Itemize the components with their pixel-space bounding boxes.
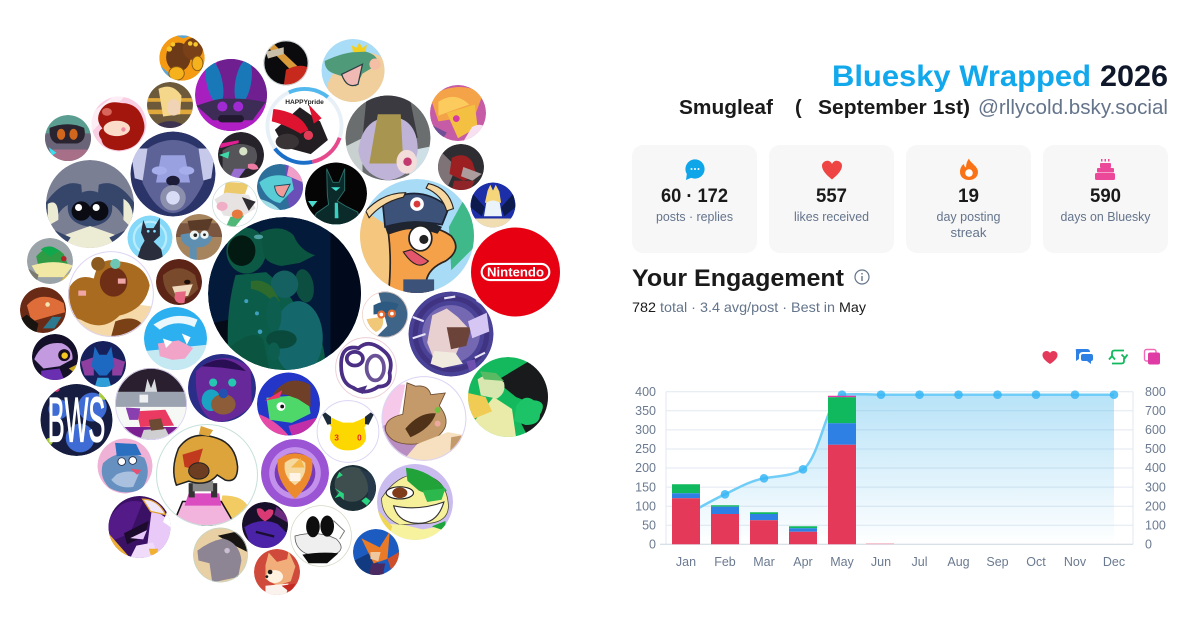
cumulative line	[686, 394, 1114, 514]
engagement summary: May	[839, 299, 866, 315]
stat card: posts and replies: posts · replies	[656, 209, 733, 224]
right axis labels: 200	[1145, 500, 1166, 514]
avatar: purple round dino	[32, 334, 78, 380]
avatar: red fox	[254, 549, 300, 595]
avatar cluster: BWS	[48, 386, 105, 456]
icon: replies	[1076, 349, 1093, 364]
avatar: brown dog	[156, 259, 202, 305]
month labels: Nov	[1064, 555, 1087, 569]
avatar: brown bear belly	[67, 251, 154, 337]
profile line: September 1st)	[818, 97, 970, 119]
avatar: pride wolf: HAPPYpride	[285, 99, 324, 106]
avatar: gray road stripes	[115, 368, 187, 440]
stacked bars	[672, 396, 894, 544]
title: 2026	[1100, 60, 1168, 93]
month labels: Feb	[714, 555, 736, 569]
avatar: teal dragon	[257, 164, 303, 210]
month labels: Jun	[871, 555, 891, 569]
stat card: likes received	[769, 145, 894, 253]
month labels: Apr	[793, 555, 813, 569]
avatar: purple bear	[188, 354, 256, 422]
avatar cluster	[20, 35, 560, 595]
profile line: (	[795, 97, 802, 119]
avatar: blue with glasses	[98, 438, 152, 494]
avatar: green girl	[257, 372, 320, 436]
month labels: Aug	[947, 555, 970, 569]
avatar: crowned blue creature	[470, 182, 516, 228]
left axis labels: 250	[635, 442, 656, 456]
avatar: purple moth	[195, 59, 267, 131]
avatar: blue dog	[130, 132, 216, 216]
right axis labels: 400	[1145, 461, 1166, 475]
month labels: May	[830, 555, 855, 569]
left axis labels: 200	[635, 461, 656, 475]
chart legend	[1042, 349, 1160, 364]
avatar: black and gold	[264, 40, 308, 86]
stat card: likes received: likes received	[794, 209, 869, 224]
avatar: orange lizard	[20, 287, 66, 333]
avatar: Pikachu 30 logo: 0	[357, 433, 362, 442]
avatar: purple heart	[242, 502, 288, 548]
right axis labels: 700	[1145, 404, 1166, 418]
month labels: Mar	[753, 555, 775, 569]
left axis labels: 50	[642, 518, 656, 532]
avatar: orange fox	[430, 85, 486, 141]
icon: flame	[960, 158, 978, 180]
avatar: gray hedgehog	[193, 528, 248, 582]
avatar: dragonite in hat	[360, 179, 474, 293]
avatar: purple lion badge	[261, 439, 329, 507]
icon: heart	[822, 161, 842, 180]
stat card: days on Bluesky: 590	[1090, 185, 1121, 207]
icon: cake	[1095, 159, 1115, 180]
area under cumulative line	[686, 394, 1114, 544]
avatar: eevee	[382, 376, 466, 461]
avatar: blue bird with glasses	[362, 292, 408, 338]
avatar: purple outline swirl	[335, 337, 397, 399]
line points	[721, 390, 1118, 499]
left axis labels: 400	[635, 385, 656, 399]
right axis labels: 0	[1145, 538, 1152, 552]
avatar: pride wolf	[266, 87, 344, 165]
left axis labels: 350	[635, 404, 656, 418]
stat card: day posting streak: day posting	[936, 209, 1000, 224]
profile line: @rllycold.bsky.social	[978, 97, 1168, 119]
right axis labels: 500	[1145, 442, 1166, 456]
avatar: purple and gold beast	[108, 496, 170, 558]
stat card: likes received: 557	[816, 185, 847, 207]
engagement chart	[635, 385, 1166, 569]
avatar: BWS logo	[40, 384, 112, 456]
avatar: white dog with dress	[156, 424, 258, 526]
stat card: posts and replies	[632, 145, 757, 253]
right axis labels	[1145, 385, 1166, 552]
month labels	[676, 555, 1125, 569]
avatar: yellow grinning snivy	[377, 464, 453, 540]
avatar: orange paws	[159, 35, 205, 81]
avatar: red hair	[92, 96, 146, 152]
month labels: Oct	[1026, 555, 1046, 569]
avatar: dark green	[330, 465, 376, 511]
left axis labels: 150	[635, 480, 656, 494]
right axis labels: 600	[1145, 423, 1166, 437]
avatar: big dark green inflated figure	[208, 217, 361, 375]
icon: info	[855, 270, 869, 284]
heading: your engagement: Your Engagement	[632, 265, 844, 292]
avatar: Nintendo logo	[471, 228, 560, 316]
icon: reposts	[1109, 350, 1128, 364]
avatar: gray mask	[45, 115, 91, 161]
avatar: blue rings dog	[128, 216, 172, 260]
avatar: Nintendo logo: Nintendo	[487, 264, 544, 279]
left axis labels	[635, 385, 656, 552]
right axis labels: 800	[1145, 385, 1166, 399]
avatar: black and white sketch	[290, 505, 352, 567]
month labels: Dec	[1103, 555, 1125, 569]
avatar: crowned crocodile	[322, 39, 384, 102]
avatar: cow	[212, 181, 258, 227]
avatar: snake with wide eyes	[176, 214, 222, 260]
avatar: blond character	[147, 82, 193, 128]
stat card: posts and replies: 60 · 172	[661, 185, 728, 207]
avatar: snivy head	[27, 238, 73, 284]
left axis labels: 100	[635, 500, 656, 514]
stat card: day posting streak	[906, 145, 1031, 253]
avatar: Pikachu 30 logo	[316, 400, 380, 463]
avatar: gray and blue creature	[46, 160, 134, 248]
month labels: Jul	[912, 555, 927, 569]
icon: quotes	[1144, 350, 1160, 364]
right axis labels: 300	[1145, 480, 1166, 494]
right axis labels: 100	[1145, 518, 1166, 532]
stat card: days on Bluesky: days on Bluesky	[1060, 209, 1151, 224]
title: Bluesky Wrapped	[832, 60, 1091, 93]
icon: likes	[1042, 351, 1058, 364]
avatar: black figure	[305, 162, 367, 224]
avatar: purple badge wolf	[408, 292, 494, 376]
left axis labels: 0	[649, 538, 656, 552]
stat card: day posting streak: streak	[950, 225, 987, 240]
avatar: Pikachu 30 logo: 3	[334, 433, 339, 442]
stat card: day posting streak: 19	[958, 185, 979, 207]
avatar: blue and orange dragon	[353, 529, 399, 575]
month labels: Jan	[676, 555, 696, 569]
left axis labels: 300	[635, 423, 656, 437]
avatar: snivy on green and black	[468, 357, 548, 437]
engagement summary: total · 3.4 avg/post · Best in	[660, 299, 835, 315]
avatar: blue smiling dragon	[80, 341, 126, 387]
avatar: gray character with tongue	[218, 132, 264, 178]
avatar: silver-hair figure	[346, 96, 430, 180]
avatar: blue sky and pink creature	[144, 307, 207, 370]
profile line	[679, 97, 1168, 119]
stat card: days on Bluesky	[1043, 145, 1168, 253]
engagement summary: 782	[632, 299, 656, 315]
profile line: Smugleaf	[679, 97, 773, 119]
icon: chat bubble	[685, 159, 705, 180]
avatar: red-hair wolf	[438, 144, 484, 190]
month labels: Sep	[986, 555, 1009, 569]
